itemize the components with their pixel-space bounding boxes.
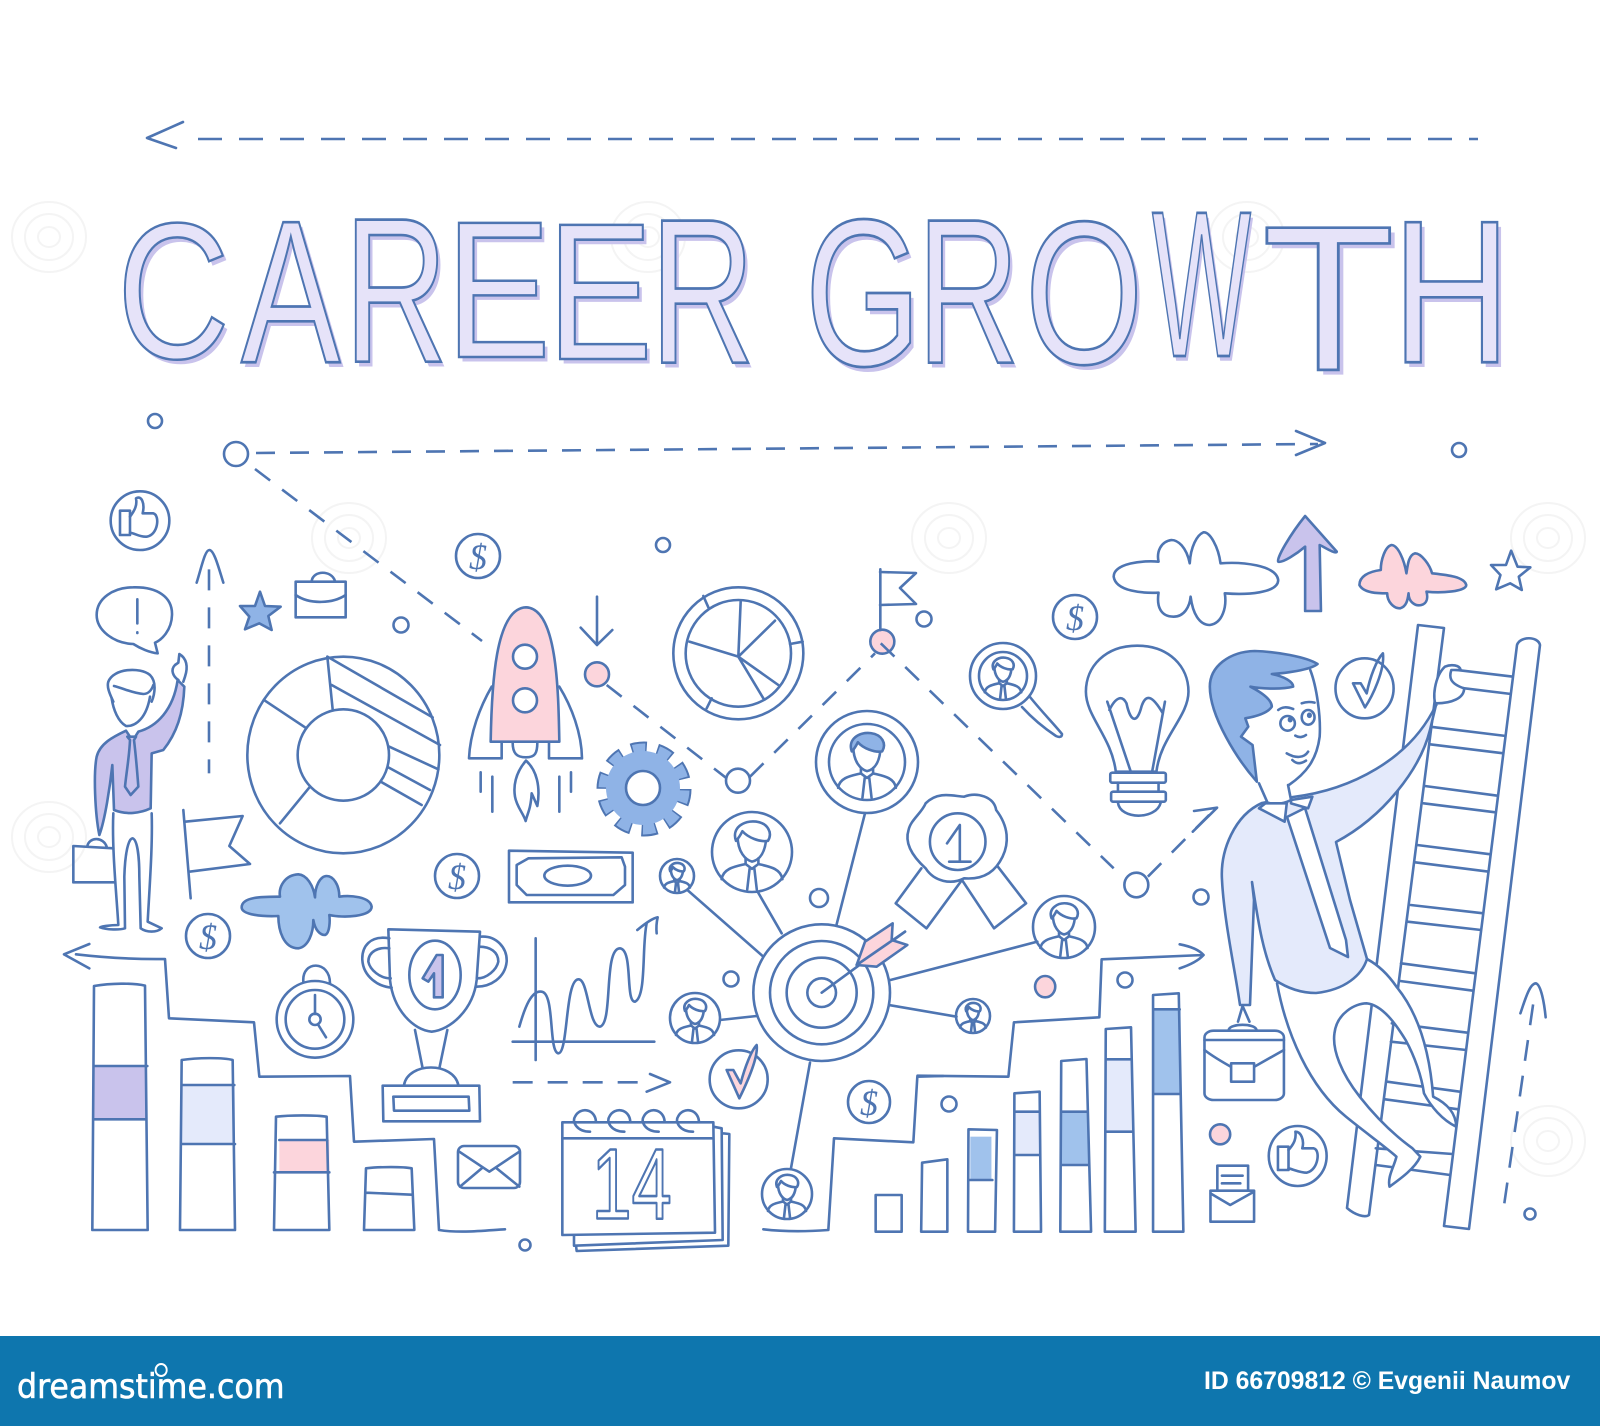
hand on ladder (1434, 665, 1464, 705)
legs (1277, 959, 1456, 1187)
calendar date: 14 (592, 1128, 672, 1240)
chart: bar four (364, 1167, 414, 1230)
title: W (1152, 167, 1251, 401)
connector lines (889, 942, 1037, 1017)
dollar coins: $ (469, 537, 487, 577)
chart: pie in ring (673, 587, 803, 719)
arrow: dashed up arrow (197, 550, 223, 773)
arrow: dashed right arrow (513, 1074, 670, 1092)
arrow: dashed path from node to the right (224, 431, 1325, 641)
dollar coins: $ (1066, 598, 1084, 638)
icon: blue cloud (242, 874, 372, 948)
icon: pink cloud (1359, 545, 1466, 608)
credit text: ID 66709812 © Evgenii Naumov (1204, 1367, 1570, 1395)
icon: rocket (469, 607, 582, 821)
panel: target and network (513, 813, 943, 1251)
right dashed path with node and arrow (881, 643, 1217, 897)
title: H (1392, 177, 1511, 406)
icon: target with arrow (753, 923, 907, 1061)
title: T (1262, 182, 1395, 415)
icon: thumbs up lower (1269, 1126, 1327, 1186)
icon: magnifier with avatar (970, 643, 1062, 737)
line chart: dashed zig zag with nodes (585, 569, 894, 793)
icon: briefcase (296, 573, 346, 617)
icon: envelope with paper (1210, 1166, 1254, 1222)
face, hair and collar (1210, 651, 1320, 822)
dollar coins (186, 534, 1097, 1123)
dollar coins: $ (199, 917, 217, 957)
icon: trophy (362, 929, 507, 1121)
dollar coins: $ (448, 857, 466, 897)
figure: small man waving (73, 654, 187, 932)
panel: descending staircase and bars (64, 929, 520, 1232)
torso shirt (1222, 705, 1436, 1005)
title: O (1025, 178, 1143, 407)
icon: speech bubble (97, 587, 172, 653)
arrow: top dashed arrow pointing left (147, 122, 1478, 148)
small circles near the top path (148, 414, 1536, 1250)
icon: white cloud (1114, 532, 1278, 625)
figure: big climbing man (1210, 651, 1464, 1187)
title (117, 167, 1511, 415)
chart: donut (247, 657, 440, 853)
title: R (650, 176, 755, 407)
staircase rising start (763, 1076, 943, 1231)
icon: outline star (1491, 551, 1530, 590)
arrow: staircase line pointing left (64, 944, 505, 1232)
icon: flag on peak (880, 572, 916, 605)
title: C (117, 182, 230, 400)
arrow: small down arrow (581, 597, 612, 645)
icon: avatars (660, 812, 1095, 1219)
chart: bar three pink (274, 1115, 329, 1230)
title: G (805, 175, 921, 410)
icon: stopwatch (277, 966, 353, 1058)
chart: growth curve (513, 917, 658, 1060)
arrow: lavender up arrow (1278, 516, 1337, 611)
icon: award rosette (896, 795, 1026, 928)
title: A (241, 177, 340, 406)
icon: gear (604, 749, 684, 829)
chart: bar one lavender (92, 984, 148, 1230)
panel: center rocket and nodes (469, 569, 894, 902)
icon: framed avatar with blue hair (816, 711, 918, 813)
connector lines (682, 813, 865, 1170)
icon: envelope (458, 1146, 520, 1188)
title: R (917, 176, 1019, 407)
title: R (344, 175, 447, 406)
chart: bar two pale blue (180, 1058, 235, 1230)
icon: ladder (1347, 625, 1540, 1229)
chart: small rising bars start (876, 1195, 902, 1232)
icon: check in circle (1335, 653, 1394, 718)
icon: check mark in circle (710, 1045, 768, 1108)
panel: right ladder scene (881, 516, 1546, 1232)
footer bar (0, 1336, 1600, 1426)
icon: bulb (1086, 646, 1188, 816)
icon: large briefcase (1204, 1006, 1284, 1100)
icon: thumbs up (111, 491, 169, 550)
icon: blue star (240, 592, 281, 630)
icon: calendar (562, 1110, 729, 1251)
panel: left figures (73, 491, 440, 948)
arrow: rising staircase to the right (917, 944, 1204, 1077)
dollar coins: $ (860, 1083, 878, 1123)
pink and open dots (1035, 976, 1230, 1144)
icon: flag (183, 810, 250, 898)
arrow: right dashed up arrow (1504, 983, 1546, 1203)
icon: banknote (509, 851, 633, 902)
title: E (547, 182, 653, 401)
chart: rising bars (921, 993, 1183, 1232)
title: E (446, 180, 551, 399)
tie (1287, 808, 1348, 957)
logo text: dreamstime.com (17, 1367, 285, 1407)
